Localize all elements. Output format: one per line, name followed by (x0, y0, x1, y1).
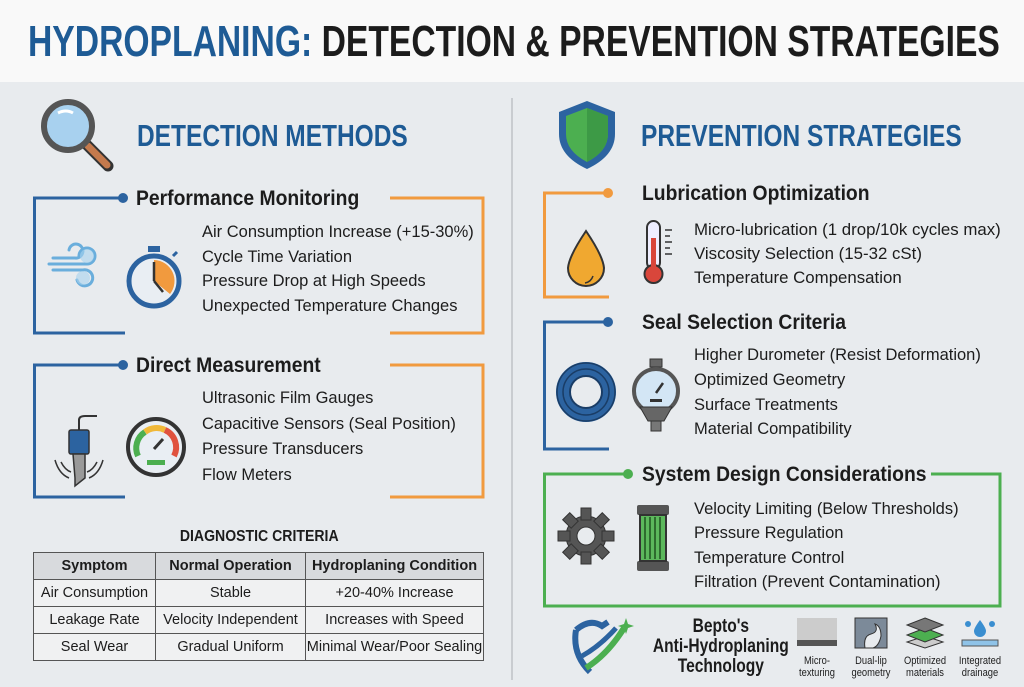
heading: System Design Considerations (642, 463, 927, 486)
table: Leakage Rate (49, 612, 140, 628)
panel: performance monitoring (33, 187, 484, 334)
list: Ultrasonic Film Gauges (202, 388, 373, 407)
panel: direct measurement (33, 354, 484, 498)
heading: Lubrication Optimization (642, 182, 870, 205)
list: Velocity Limiting (Below Thresholds) (694, 499, 959, 518)
list: Viscosity Selection (15-32 cSt) (694, 244, 922, 263)
title: HYDROPLANING: DETECTION & PREVENTION STRATEGIES (28, 17, 1000, 66)
list: Pressure Transducers (202, 439, 363, 458)
list: Temperature Control (694, 548, 844, 567)
icon: oil drop (567, 229, 605, 287)
divider (511, 98, 513, 680)
icon: air flow (48, 242, 96, 288)
table heading: DIAGNOSTIC CRITERIA (180, 528, 338, 545)
icon: micro-texturing (797, 618, 837, 679)
table: Minimal Wear/Poor Sealing (307, 639, 482, 655)
icon: micro-texturing: texturing (799, 667, 835, 679)
table: Velocity Independent (163, 612, 298, 628)
list: Temperature Compensation (694, 268, 902, 287)
icon: durometer (632, 358, 680, 432)
icon: dual-lip geometry: geometry (852, 667, 890, 679)
icon: thermometer (644, 220, 672, 284)
icon: magnifier (41, 99, 114, 172)
diagnostic criteria (33, 528, 484, 661)
table: Symptom (61, 558, 128, 574)
table: Stable (210, 585, 251, 601)
list: Surface Treatments (694, 395, 838, 414)
icon: dual-lip geometry (852, 618, 890, 679)
heading: Performance Monitoring (136, 187, 359, 210)
footer: bepto technology (572, 616, 1001, 679)
text: bepto's anti-hydroplaning technology: Anti-Hydroplaning (653, 636, 789, 657)
heading: Direct Measurement (136, 354, 321, 377)
table: Seal Wear (61, 639, 128, 655)
table: Gradual Uniform (177, 639, 284, 655)
list: Pressure Regulation (694, 523, 843, 542)
table: +20-40% Increase (335, 585, 454, 601)
list: Cycle Time Variation (202, 246, 352, 266)
text: bepto's anti-hydroplaning technology: Bepto's (693, 616, 749, 637)
table: Increases with Speed (325, 612, 464, 628)
list (694, 345, 981, 438)
heading: Seal Selection Criteria (642, 311, 846, 334)
list: Air Consumption Increase (+15-30%) (202, 222, 474, 241)
heading: prevention strategies: PREVENTION STRATEGIES (641, 118, 962, 153)
icon: filter (637, 505, 669, 571)
list (202, 388, 456, 484)
list: Higher Durometer (Resist Deformation) (694, 345, 981, 364)
icon: stopwatch (126, 246, 182, 308)
icon: shield (559, 101, 615, 169)
icon: gear (558, 508, 614, 564)
icon: o-ring (556, 362, 616, 422)
text: bepto's anti-hydroplaning technology: Technology (678, 656, 764, 677)
list: Filtration (Prevent Contamination) (694, 572, 941, 591)
list: Pressure Drop at High Speeds (202, 271, 426, 290)
icon: micro-texturing: Micro- (804, 655, 830, 667)
list: Micro-lubrication (1 drop/10k cycles max) (694, 220, 1001, 239)
icon: ultrasonic sensor (54, 415, 104, 488)
panel: system design considerations (543, 463, 1002, 608)
list (694, 220, 1001, 287)
list: Optimized Geometry (694, 370, 845, 389)
panel: seal selection criteria (543, 311, 981, 450)
list: Unexpected Temperature Changes (202, 296, 457, 314)
title band (0, 0, 1024, 82)
icon: optimized materials (904, 618, 946, 679)
table: Hydroplaning Condition (312, 558, 477, 574)
list (694, 499, 959, 591)
list: Material Compatibility (694, 419, 852, 438)
text: bepto's anti-hydroplaning technology (653, 616, 789, 677)
icon: optimized materials: materials (906, 667, 944, 679)
icon: integrated drainage: drainage (962, 667, 998, 679)
heading: detection methods: DETECTION METHODS (137, 118, 408, 153)
icon: gauge (126, 417, 186, 477)
table: Air Consumption (41, 585, 148, 601)
icon: integrated drainage: Integrated (959, 655, 1001, 667)
icon: dual-lip geometry: Dual-lip (855, 655, 887, 667)
table (33, 552, 484, 661)
list: Flow Meters (202, 464, 292, 484)
panel: lubrication optimization (543, 182, 1001, 298)
icon: bepto logo (572, 618, 634, 674)
list (202, 222, 474, 314)
list: Capacitive Sensors (Seal Position) (202, 414, 456, 432)
table: Normal Operation (169, 558, 292, 574)
icon: optimized materials: Optimized (904, 655, 946, 667)
icon: integrated drainage (959, 620, 1001, 679)
